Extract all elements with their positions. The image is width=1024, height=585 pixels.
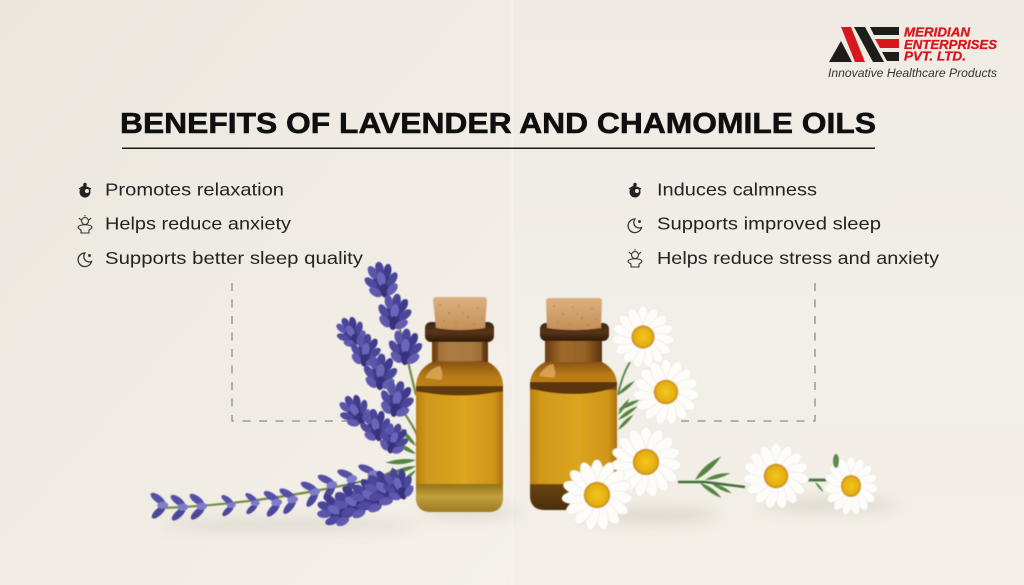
highlight <box>539 364 555 378</box>
daisy second <box>633 359 699 425</box>
list: chamomile benefits <box>628 180 939 268</box>
bottle: lavender oil <box>416 297 503 512</box>
lower lavender sprig <box>148 458 383 523</box>
daisy side <box>824 457 878 516</box>
shoulder glass <box>530 362 617 385</box>
icon: moon <box>628 219 642 233</box>
oil <box>416 392 503 492</box>
daisy front <box>561 460 633 531</box>
lower lavender head <box>311 462 420 534</box>
bottle body <box>416 342 503 512</box>
daisy lying <box>743 443 809 509</box>
oil surface <box>530 382 617 394</box>
bud <box>833 454 839 468</box>
cork <box>546 298 602 330</box>
chamomile stems and leaves <box>617 362 830 500</box>
lavender leaves <box>385 426 417 484</box>
cork <box>433 297 487 330</box>
logo tagline: Innovative Healthcare Products <box>828 68 997 80</box>
icon: anxiety <box>628 249 642 267</box>
neck <box>545 340 602 364</box>
daisy third <box>610 427 682 498</box>
logo wordmark: PVT. LTD. <box>904 48 966 64</box>
bottle: chamomile oil <box>530 298 617 510</box>
soft shadows <box>160 498 900 531</box>
item: promotes relaxation: Promotes relaxation <box>105 180 284 200</box>
item: supports better sleep quality: Supports better sleep quality <box>105 248 363 268</box>
oil surface <box>416 386 503 396</box>
upper lavender heads <box>329 259 426 459</box>
illustration: lavender sprigs <box>148 259 426 534</box>
oil <box>530 390 617 485</box>
logo: Meridian Enterprises <box>828 24 997 80</box>
illustration: chamomile flowers <box>561 306 878 531</box>
list: lavender benefits <box>78 180 363 268</box>
neck <box>432 342 488 364</box>
logo wordmark: MERIDIAN <box>904 24 971 40</box>
logo wordmark <box>904 24 997 64</box>
dashed connector: chamomile <box>675 283 815 421</box>
collar <box>425 322 494 342</box>
title: BENEFITS OF LAVENDER AND CHAMOMILE OILS <box>120 108 876 140</box>
background: right panel <box>512 0 1024 585</box>
icon: calmness <box>629 183 641 198</box>
item: helps reduce anxiety: Helps reduce anxiety <box>105 214 291 234</box>
highlight <box>425 366 442 380</box>
daisy upper <box>612 306 674 369</box>
item: helps reduce stress and anxiety: Helps reduce stress and anxiety <box>657 248 939 268</box>
item: induces calmness: Induces calmness <box>657 180 817 200</box>
dashed connector: lavender <box>232 283 350 421</box>
lavender stems <box>163 285 418 512</box>
shoulder glass <box>416 362 503 388</box>
logo wordmark: ENTERPRISES <box>904 37 997 52</box>
glass base <box>530 484 617 510</box>
item: supports improved sleep: Supports improved sleep <box>657 214 881 234</box>
logo mark <box>829 27 899 62</box>
icon: relaxation <box>79 183 91 198</box>
bottle body <box>530 340 617 510</box>
background: left panel <box>0 0 512 585</box>
glass base <box>416 484 503 512</box>
icon: anxiety <box>78 215 92 233</box>
icon: moon <box>78 253 92 267</box>
collar <box>540 323 609 341</box>
